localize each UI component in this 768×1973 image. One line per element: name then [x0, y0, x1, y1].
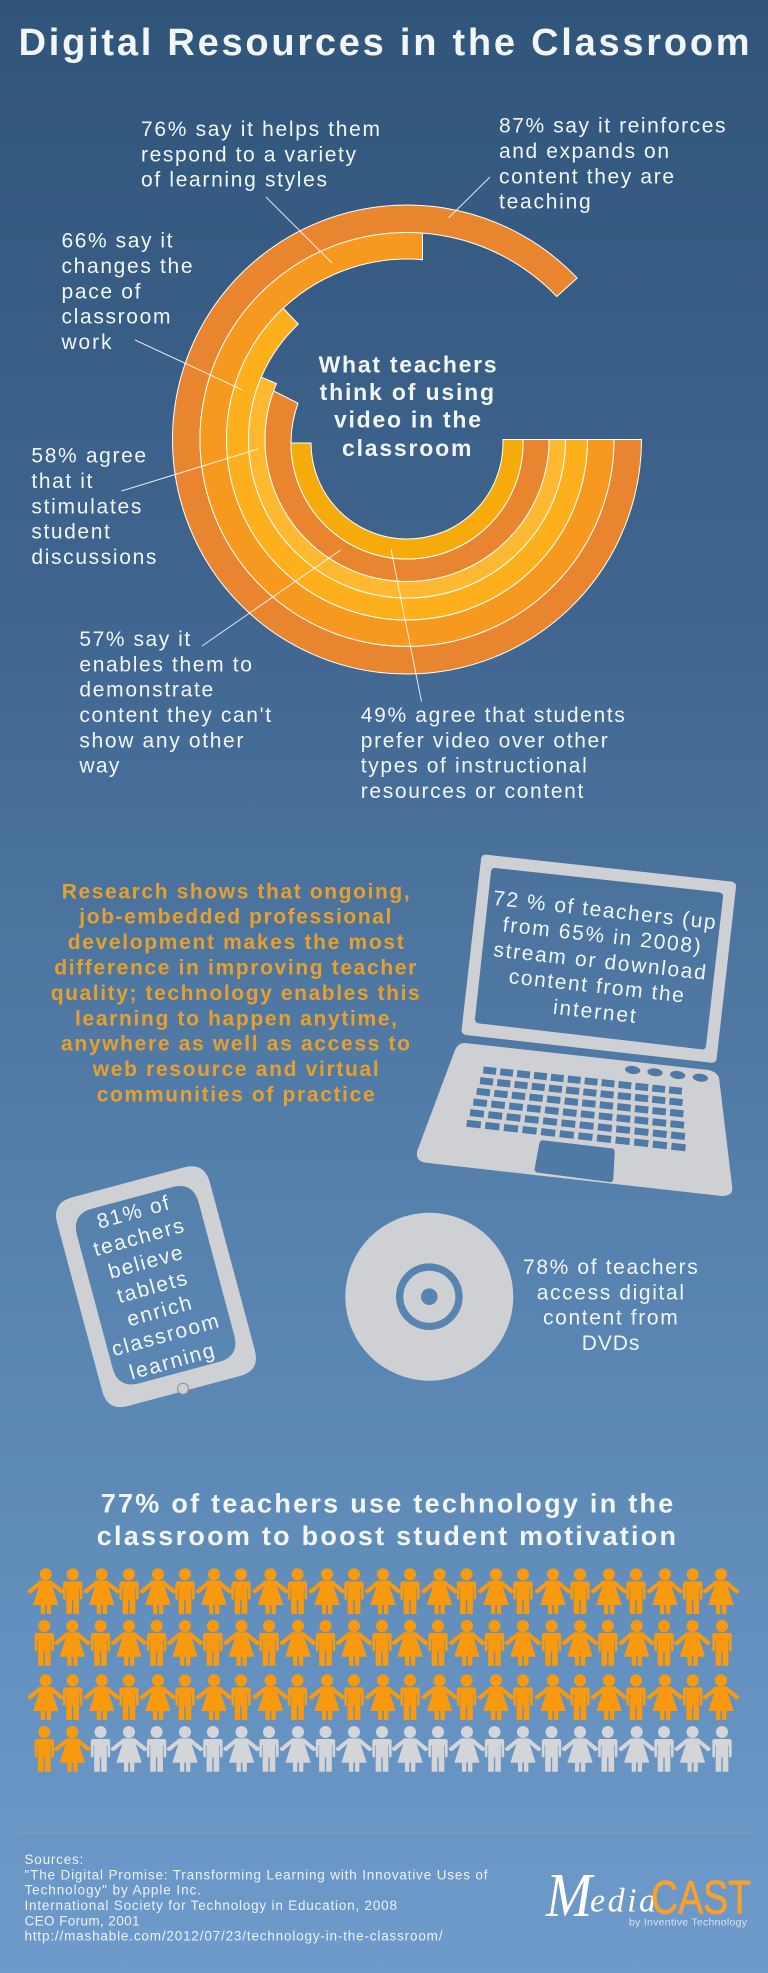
callout: 66%: 66% say it	[62, 230, 173, 253]
chart centre heading: think of using	[320, 379, 494, 405]
callout: 66%: pace of	[62, 280, 141, 303]
chart: radial bar chart of teacher opinions	[172, 205, 642, 674]
callout: 57%: 57% say it	[79, 628, 190, 651]
sources text: "The Digital Promise: Transforming Learning with Innovative Uses of	[24, 1867, 488, 1882]
laptop text: from 65% in 2008)	[502, 913, 702, 958]
heading: 77% of teachers: classroom to boost student motivation	[97, 1521, 676, 1551]
callout: 76%: respond to a variety	[141, 143, 356, 166]
row 1	[27, 1568, 739, 1614]
dvd text: content from	[543, 1307, 678, 1330]
laptop text: stream or download	[492, 938, 707, 985]
callout: 66%: classroom	[62, 306, 170, 329]
sources text: http://mashable.com/2012/07/23/technology-in-the-classroom/	[24, 1929, 443, 1944]
callout: 76%: of learning styles	[141, 169, 327, 192]
ring: 66%	[226, 308, 588, 620]
title: Digital Resources in the Classroom	[19, 22, 750, 64]
callout: 57%	[78, 628, 271, 778]
laptop text: content from the	[508, 965, 685, 1007]
row 4	[35, 1726, 732, 1772]
callout: 57%: content they can't	[79, 704, 271, 727]
orange research paragraph	[51, 880, 420, 1106]
callout: 87%	[499, 115, 726, 214]
callout: 49%: types of instructional	[361, 755, 587, 778]
callout: 87%: and expands on	[499, 140, 669, 163]
callout: 57%: show any other	[79, 729, 243, 752]
callout: 57%: demonstrate	[79, 679, 213, 702]
callout: 87%: 87% say it reinforces	[499, 115, 726, 138]
tablet text: believe	[106, 1241, 185, 1284]
sources text: CEO Forum, 2001	[24, 1913, 140, 1928]
callout: 49%: 49% agree that students	[361, 704, 625, 727]
callout: 66%	[60, 230, 192, 354]
orange research paragraph: development makes the most	[68, 931, 404, 954]
sources text: Sources:	[24, 1852, 83, 1867]
sources text: Technology" by Apple Inc.	[24, 1883, 201, 1898]
callout: 87%: content they are	[499, 165, 674, 188]
trackpad	[535, 1140, 615, 1182]
callout: 58%	[31, 445, 156, 569]
orange research paragraph: difference in improving teacher	[54, 957, 416, 980]
callout: 49%	[361, 704, 625, 803]
callout: 58%: that it	[31, 470, 93, 493]
tablet home button	[178, 1383, 188, 1394]
tablet text: learning	[127, 1339, 217, 1384]
chart centre heading: video in the	[334, 407, 481, 433]
tablet body	[52, 1162, 260, 1411]
logo: MediaCAST: M	[545, 1862, 595, 1930]
callout: 57%: way	[78, 755, 120, 778]
logo: MediaCAST: by Inventive Technology	[629, 1917, 748, 1929]
heading: 77% of teachers	[97, 1488, 676, 1551]
callout: 58%: stimulates	[31, 495, 141, 518]
callout: 66%: changes the	[62, 255, 192, 278]
orange research paragraph: web resource and virtual	[92, 1058, 379, 1081]
keyboard keys	[467, 1070, 690, 1148]
chart centre heading: classroom	[342, 435, 471, 461]
callout: 57%: enables them to	[79, 653, 252, 676]
dvd text: DVDs	[582, 1332, 639, 1355]
icon: dvd	[345, 1213, 513, 1381]
icon: tablet	[52, 1162, 260, 1411]
logo: MediaCAST: edia	[590, 1883, 656, 1920]
callout: 58%: student	[31, 521, 110, 544]
callout: 76%: 76% say it helps them	[141, 118, 380, 141]
orange research paragraph: quality; technology enables this	[51, 982, 420, 1005]
pictogram: 77 of 100 teachers	[27, 1568, 739, 1772]
tablet text: tablets	[114, 1267, 190, 1308]
ring: 58%	[248, 377, 566, 598]
laptop base	[417, 1043, 732, 1196]
orange research paragraph: anywhere as well as access to	[61, 1033, 410, 1056]
callout: 49%: prefer video over other	[361, 729, 608, 752]
callout: 58%: 58% agree	[31, 445, 146, 468]
tablet text	[91, 1192, 221, 1384]
ring: 76%	[200, 233, 614, 646]
ring: 87%	[172, 205, 642, 674]
callout: 58%: discussions	[31, 546, 156, 569]
chart centre heading: What teachers	[319, 351, 497, 377]
tablet text: teachers	[91, 1214, 186, 1261]
callout: 49%: resources or content	[361, 780, 583, 803]
dvd text: 78% of teachers	[523, 1256, 698, 1279]
ring: 49%	[291, 440, 523, 559]
sources text: International Society for Technology in Education, 2008	[24, 1898, 397, 1913]
dvd text: access digital	[537, 1281, 684, 1304]
tablet text: classroom	[109, 1310, 221, 1361]
heading: 77% of teachers: 77% of teachers use technology in the	[101, 1488, 673, 1518]
laptop screen	[462, 855, 736, 1063]
orange research paragraph: job-embedded professional	[78, 906, 391, 929]
callout: 76%	[141, 118, 380, 192]
icon: laptop	[417, 855, 736, 1196]
tablet text: 81% of	[94, 1192, 172, 1234]
callout: 87%: teaching	[499, 191, 591, 214]
orange research paragraph: Research shows that ongoing,	[62, 880, 410, 903]
chart centre heading	[319, 351, 497, 461]
laptop text: internet	[552, 996, 637, 1028]
row 3	[27, 1674, 739, 1720]
orange research paragraph: learning to happen anytime,	[75, 1007, 397, 1030]
row 2	[35, 1620, 732, 1666]
sources text	[24, 1852, 488, 1944]
laptop text: 72 % of teachers (up	[492, 887, 717, 934]
function buttons	[625, 1065, 708, 1083]
ring: 57%	[265, 391, 549, 582]
tablet text: enrich	[124, 1292, 194, 1331]
leader lines	[122, 177, 490, 702]
logo: MediaCAST	[545, 1862, 751, 1930]
callout: 66%: work	[60, 331, 112, 354]
laptop text	[492, 887, 717, 1028]
dvd text	[523, 1256, 698, 1355]
orange research paragraph: communities of practice	[97, 1083, 375, 1106]
